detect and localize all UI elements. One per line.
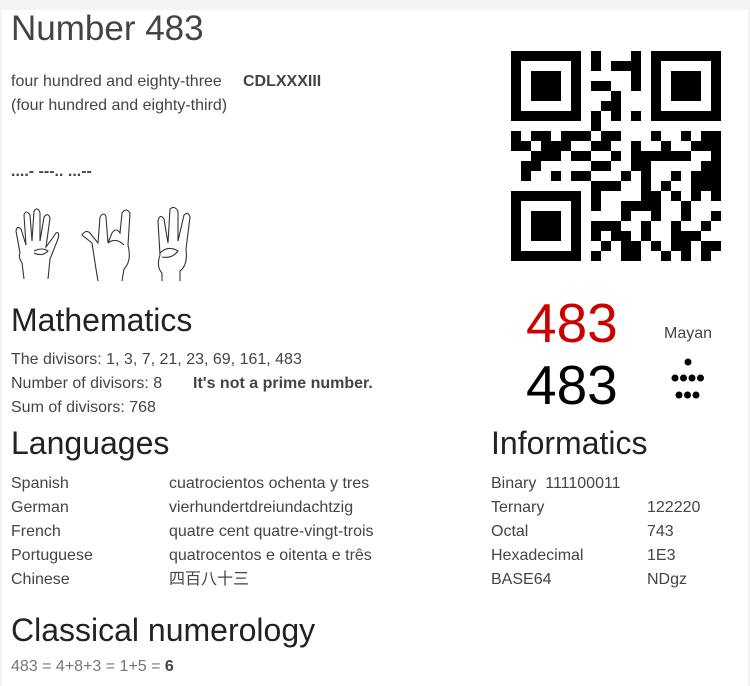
text: Spanish: [11, 475, 69, 492]
text: Octal: [491, 523, 528, 540]
text: NDgz: [647, 571, 687, 588]
text: Portuguese: [11, 547, 93, 564]
text: divisors: [11, 351, 302, 416]
text: roman numeral: CDLXXXIII: [243, 73, 321, 90]
text: German: [11, 499, 69, 516]
text: numerology: 483 = 4+8+3 = 1+5 = 6: [11, 658, 174, 675]
text: 743: [647, 523, 674, 540]
text: Hexadecimal: [491, 547, 583, 564]
text: quatre cent quatre-vingt-trois: [169, 523, 374, 540]
text: 1E3: [647, 547, 675, 564]
text: prime status: It's not a prime number.: [193, 375, 373, 392]
text: French: [11, 523, 61, 540]
text: BASE64: [491, 571, 551, 588]
text: Chinese: [11, 571, 70, 588]
text: 122220: [647, 499, 700, 516]
text: vierhundertdreiundachtzig: [169, 499, 353, 516]
text: words: (four hundred and eighty-third): [11, 97, 227, 114]
text: morse code: ....- ---.. ...--: [11, 163, 92, 180]
big number red: 483: [526, 292, 618, 354]
text: quatrocentos e oitenta e três: [169, 547, 372, 564]
text: divisors: The divisors: 1, 3, 7, 21, 23, 69, 161, 483: [11, 351, 302, 368]
text: divisors: Sum of divisors: 768: [11, 399, 156, 416]
text: Binary 111100011: [491, 475, 621, 492]
heading: Languages: Languages: [11, 425, 169, 461]
table: languages: [11, 475, 374, 588]
text: cuatrocientos ochenta y tres: [169, 475, 369, 492]
text: words: [11, 73, 227, 114]
heading: Mathematics: Mathematics: [11, 302, 192, 338]
icon: sign language hands: [16, 206, 191, 282]
table: informatics: [491, 475, 700, 588]
text: 四百八十三: [169, 571, 249, 588]
big number black: 483: [526, 354, 618, 416]
QR code: [511, 51, 721, 261]
heading: Classical numerology: Classical numerology: [11, 612, 315, 648]
text: words: four hundred and eighty-three: [11, 73, 222, 90]
icon: mayan numeral: [672, 358, 704, 398]
text: Ternary: [491, 499, 544, 516]
heading: Informatics: Informatics: [491, 425, 647, 461]
text: divisors: Number of divisors: 8: [11, 375, 162, 392]
title: Number 483: [11, 9, 204, 48]
label: Mayan: Mayan: [664, 325, 712, 342]
